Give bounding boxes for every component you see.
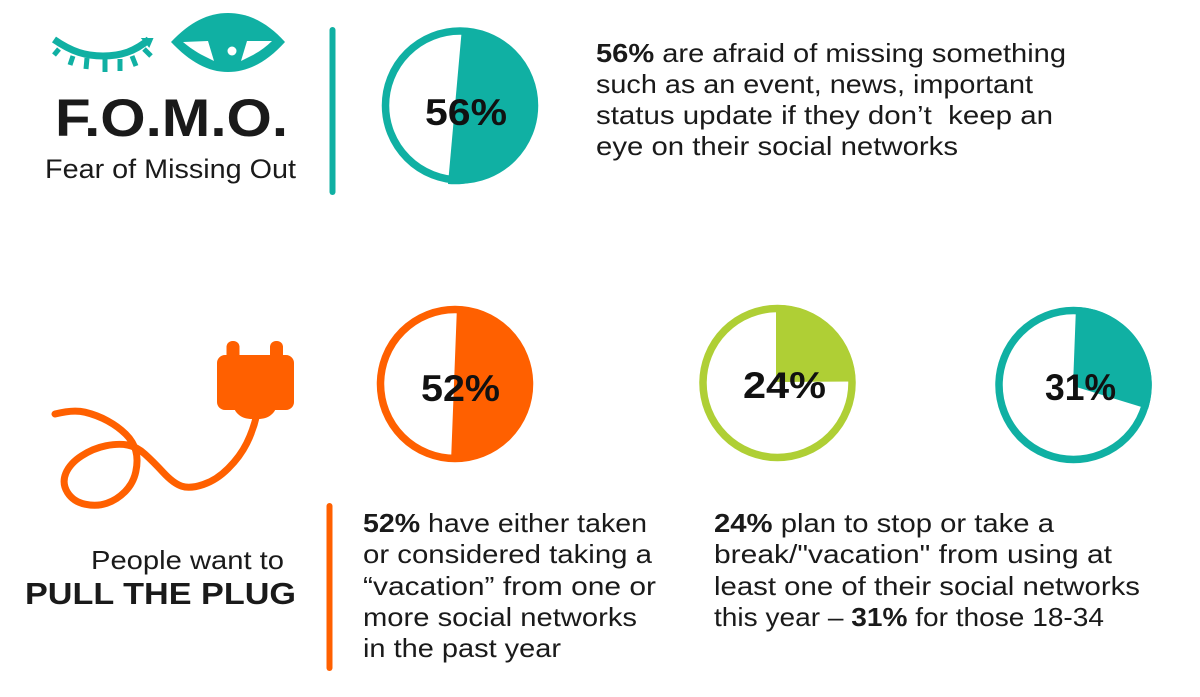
pie chart: 31%: 31% xyxy=(1045,367,1116,408)
text block: 52% description xyxy=(363,508,656,663)
heading: PULL THE PLUG: PULL THE PLUG xyxy=(25,576,296,611)
pie chart: 56%: 56% xyxy=(425,92,507,133)
panel: FOMO logo xyxy=(45,13,297,184)
text block: 24% description xyxy=(714,508,1140,632)
text block: 56% description: such as an event, news, important xyxy=(596,69,1034,99)
heading: People want to: People want to xyxy=(91,545,284,575)
pie chart: 24% xyxy=(703,305,856,458)
text block: 56% description: 56% are afraid of missing something xyxy=(596,38,1066,68)
text block: 56% description: eye on their social networks xyxy=(596,131,958,161)
divider: orange xyxy=(326,506,332,668)
subtitle: Fear of Missing Out: Fear of Missing Out xyxy=(45,154,297,184)
icon: plug with cord xyxy=(55,341,294,505)
text block: 56% description xyxy=(596,38,1066,161)
text block: 24% description: least one of their social networks xyxy=(714,571,1140,601)
text block: 52% description: more social networks xyxy=(363,602,637,632)
text block: 24% description: this year – 31% for those 18-34 xyxy=(714,602,1104,632)
text block: 24% description: break/"vacation" from using at xyxy=(714,539,1113,569)
text block: 52% description: 52% have either taken xyxy=(363,508,647,538)
icon: closed eye xyxy=(54,39,152,72)
divider: teal xyxy=(330,30,336,192)
text block: 24% description: 24% plan to stop or take a xyxy=(714,508,1055,538)
text block: 52% description: in the past year xyxy=(363,633,561,663)
pie chart: 52%: 52% xyxy=(421,368,500,409)
pie chart: 24%: 24% xyxy=(743,365,826,406)
pie chart: 31% xyxy=(999,307,1152,460)
text block: 52% description: “vacation” from one or xyxy=(363,571,656,601)
pie chart: 52% xyxy=(380,306,532,462)
text block: 56% description: status update if they don’t keep an xyxy=(596,100,1053,130)
title: F.O.M.O.: F.O.M.O. xyxy=(55,89,288,148)
text block: 52% description: or considered taking a xyxy=(363,539,653,569)
icon: open eye xyxy=(171,13,285,72)
pie chart: 56% xyxy=(386,28,534,184)
